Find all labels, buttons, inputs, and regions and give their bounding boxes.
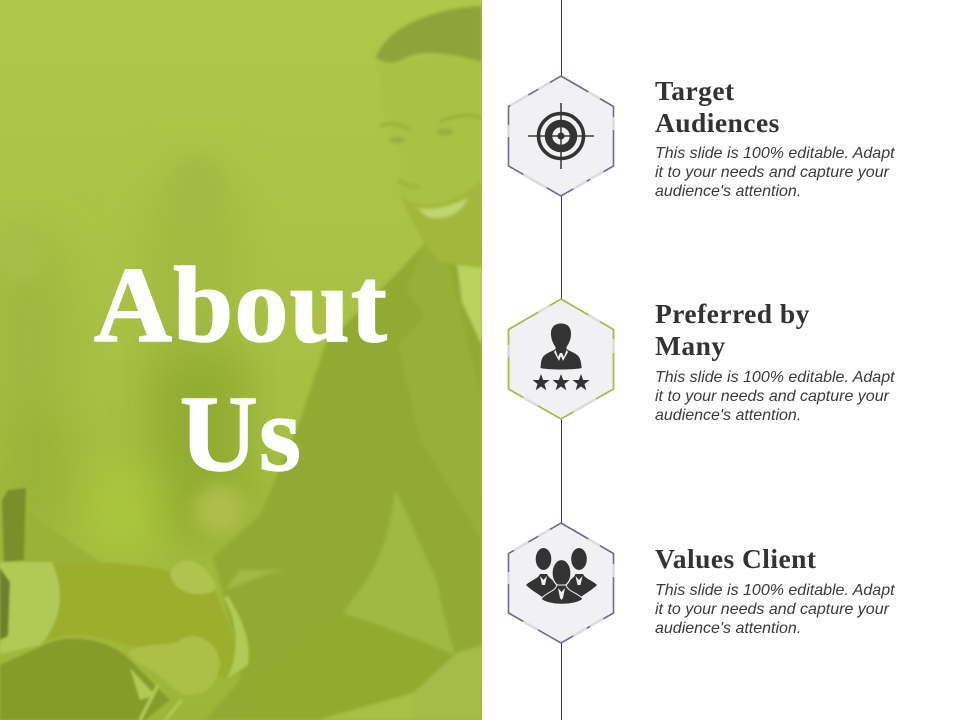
heading: target audiences (655, 75, 780, 138)
text: preferred by many description: audience's attention. (655, 407, 801, 424)
text: values client description: This slide is 100% editable. Adapt (655, 582, 895, 599)
handshake: sleeves and hands (0, 488, 249, 720)
vertical timeline line (561, 0, 562, 720)
man: jacket (205, 236, 482, 720)
text: preferred by many description: it to your needs and capture your (655, 388, 889, 405)
heading: preferred by many: Preferred by (655, 298, 810, 329)
heading: preferred by many: Many (655, 330, 726, 361)
text: target audiences description: it to your needs and capture your (655, 164, 889, 181)
title: About (94, 246, 388, 365)
text: values client description (655, 582, 896, 637)
text: preferred by many description: This slide is 100% editable. Adapt (655, 369, 895, 386)
text: target audiences description: audience's attention. (655, 183, 801, 200)
man: face (376, 6, 482, 268)
text: values client description: it to your needs and capture your (655, 601, 889, 618)
item 1: target audiences (655, 75, 896, 200)
icon: target hexagon (507, 75, 615, 197)
title: Us (180, 375, 302, 494)
heading: target audiences: Audiences (655, 107, 780, 138)
text: values client description: audience's attention. (655, 620, 801, 637)
text: target audiences description (655, 145, 896, 200)
text: preferred by many description (655, 369, 896, 424)
text: target audiences description: This slide is 100% editable. Adapt (655, 145, 895, 162)
item 2: preferred by many (655, 298, 896, 424)
background photo panel (0, 0, 482, 720)
icon: preferred person hexagon (507, 298, 615, 420)
heading: preferred by many (655, 298, 810, 361)
heading: values client: Values Client (655, 543, 816, 574)
title (94, 246, 388, 494)
item 3: values client (655, 543, 896, 637)
icon: clients group hexagon (507, 522, 615, 644)
heading: target audiences: Target (655, 75, 735, 106)
